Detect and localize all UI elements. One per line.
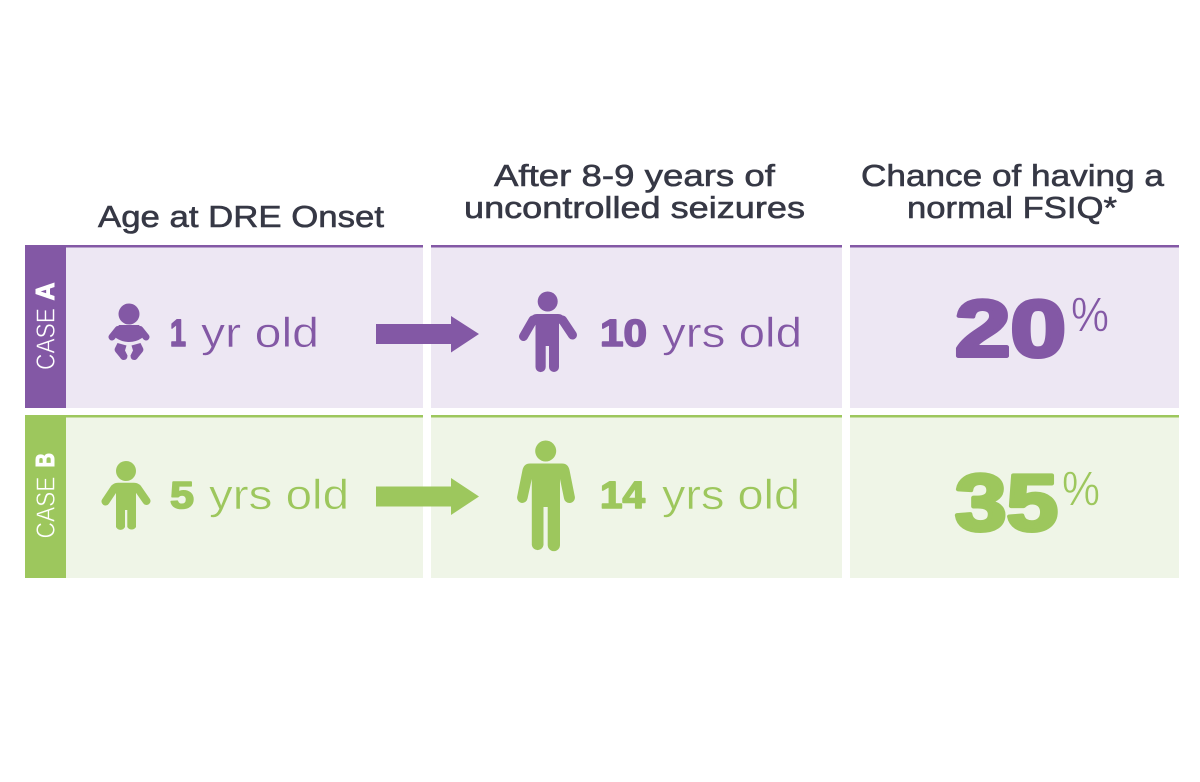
heading: chance of having a normal FSIQ [861, 158, 1165, 225]
icon: baby [112, 304, 146, 360]
heading: chance of having a normal FSIQ: normal FSIQ* [907, 190, 1117, 225]
text: 14 yrs old: 14 [600, 475, 645, 517]
text: 1 yr old [170, 309, 319, 356]
panel: case A onset background [66, 245, 423, 408]
heading: after 8-9 years of uncontrolled seizures: After 8-9 years of [494, 158, 775, 193]
stat: 35 percent [955, 458, 1100, 547]
case A label bar [25, 245, 66, 408]
text: 5 yrs old: yrs old [209, 471, 349, 518]
text: 5 yrs old: 5 [170, 475, 194, 517]
text: 5 yrs old [170, 471, 349, 518]
heading: age at DRE onset: Age at DRE Onset [98, 199, 384, 234]
panel: case B row [25, 415, 1179, 578]
stat: 35 percent: % [1062, 463, 1100, 516]
panel: case A row [25, 245, 1179, 408]
text: 14 yrs old: yrs old [662, 471, 800, 518]
text: 1 yr old: yr old [201, 309, 319, 356]
panel: case A chance background [850, 245, 1179, 408]
arrow: case B progression [376, 478, 479, 515]
stat: 20 percent: 20 [955, 284, 1066, 373]
heading: after 8-9 years of uncontrolled seizures [464, 158, 805, 225]
icon: adult [517, 440, 575, 551]
panel: case B chance background [850, 415, 1179, 578]
text: 1 yr old: 1 [170, 313, 186, 355]
text: 10 yrs old [600, 309, 802, 356]
case A label bar: CASE [30, 308, 60, 370]
text: 14 yrs old [600, 471, 800, 518]
stat: 20 percent [955, 284, 1109, 373]
text: 10 yrs old: yrs old [662, 309, 802, 356]
heading: after 8-9 years of uncontrolled seizures: uncontrolled seizures [464, 190, 805, 225]
case B label bar [25, 415, 66, 578]
text: 10 yrs old: 10 [600, 313, 647, 355]
icon: young child [106, 461, 146, 530]
stat: 35 percent: 35 [955, 458, 1058, 547]
stat: 20 percent: % [1071, 289, 1109, 342]
panel: case B outcome background [431, 415, 842, 578]
panel: case B onset background [66, 415, 423, 578]
arrow: case A progression [376, 316, 479, 352]
case B label bar: B [30, 453, 60, 468]
panel: case A outcome background [431, 245, 842, 408]
icon: child [524, 292, 572, 372]
heading: chance of having a normal FSIQ: Chance of having a [861, 158, 1165, 193]
case B label bar: CASE [30, 476, 60, 538]
case A label bar: A [30, 282, 60, 300]
